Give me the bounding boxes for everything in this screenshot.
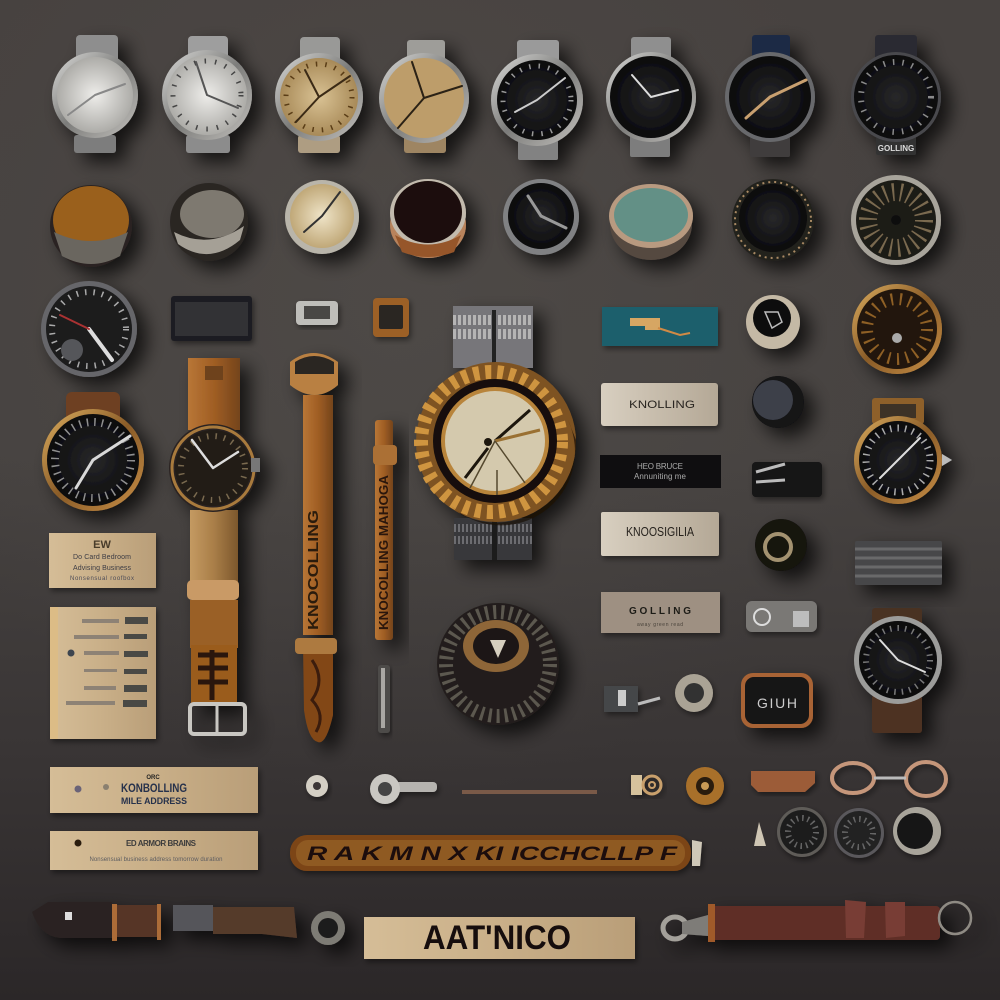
watch 8: black dial: GOLLING — [878, 144, 914, 153]
narrow strap: KNOCOLLING MAHOGA — [376, 474, 391, 630]
three mini dials — [777, 807, 941, 858]
wide label: KNOWLEDGE: MILE ADDRESS — [121, 796, 187, 806]
dial: teal face — [609, 184, 693, 260]
dial: black gold edge — [732, 179, 814, 261]
twin rings — [832, 762, 946, 796]
small dial — [746, 295, 800, 349]
watch 6: black dial — [606, 37, 696, 157]
teal label — [602, 307, 718, 346]
spec card: Nonsensual roofbox — [70, 576, 134, 582]
label: black: HEO BRUCE — [637, 462, 683, 471]
lower left strap — [32, 902, 345, 945]
tiny pendant — [754, 822, 766, 846]
label: black: Annuniting me — [634, 472, 687, 481]
spec card: Advising Business — [73, 565, 132, 572]
lower right strap with ring — [663, 900, 971, 942]
watch: left bronze — [42, 392, 144, 511]
watch 2: silver white dial — [162, 36, 252, 153]
carved leather band: R A K M N X KI ICCHCLLP F — [307, 844, 679, 865]
dial: dark gold — [852, 284, 942, 374]
label: KNOOLING beige: KNOOSIGILIA — [626, 524, 694, 539]
list card — [50, 607, 156, 739]
washer — [306, 775, 328, 797]
grey ribbed strip — [855, 541, 942, 585]
watch 4: tan dial — [379, 40, 469, 153]
copper bar — [751, 771, 815, 792]
carved leather band — [290, 835, 702, 871]
key tool — [370, 774, 437, 804]
dial: cream face — [285, 180, 359, 254]
silver plate — [746, 601, 817, 632]
watch 7: dark dial navy strap — [725, 35, 815, 157]
dial: speedometer gauge — [41, 281, 137, 377]
spec card — [49, 533, 156, 588]
thin pin — [462, 790, 597, 794]
dial: amber dome — [50, 185, 132, 267]
black clasp part — [752, 462, 822, 497]
label: KNOLLING white — [601, 383, 718, 426]
wide label: small text — [50, 831, 258, 870]
narrow strap — [373, 420, 397, 640]
dial: grey tilted case — [170, 183, 248, 261]
watch 8: black dial — [851, 35, 941, 155]
label: GOLLING: GOLLING — [629, 606, 691, 617]
watch 3: gold tan dial — [275, 37, 363, 153]
small blade pin — [378, 665, 390, 733]
dial: bronze sunburst — [851, 175, 941, 265]
watch: right lower bronze — [854, 398, 952, 504]
long strap with clasp — [290, 353, 338, 742]
gold ring — [686, 767, 724, 805]
label: black — [600, 455, 721, 488]
spec card: Do Card Bedroom — [73, 554, 131, 561]
dial: small swirl — [755, 519, 807, 571]
long strap with clasp: KNOCOLLING — [305, 510, 322, 630]
wide label: KNOWLEDGE: ORC — [146, 775, 160, 781]
watch: tall leather strap with buckle — [169, 358, 260, 734]
wide label: small text: ED ARMOR BRAINS — [126, 839, 197, 848]
label: KNOLLING white: KNOLLING — [629, 399, 695, 411]
brand label AATNICO — [364, 917, 635, 959]
copper buckle piece — [373, 298, 409, 337]
medallion — [437, 603, 559, 725]
centerpiece watch — [416, 306, 576, 560]
rounded badge — [741, 673, 813, 728]
brand label AATNICO: AAT'NICO — [423, 919, 571, 957]
label: KNOOLING beige — [601, 512, 719, 556]
dial: dark copper ring — [390, 179, 466, 258]
knob: navy dome — [752, 376, 804, 428]
rounded badge: GIUH — [757, 695, 797, 711]
spiral pieces — [631, 775, 661, 795]
wide label: small text: Nonsensual business address tomorrow duration — [90, 857, 222, 863]
metal clip — [296, 301, 338, 325]
label: GOLLING: away green read — [637, 622, 683, 628]
spec card: EW — [93, 539, 111, 551]
black fabric patch — [171, 296, 252, 341]
key clip and round dial — [604, 674, 713, 712]
label: GOLLING — [601, 592, 720, 633]
dial: dark silver — [503, 179, 579, 255]
watch 1: silver white dial — [52, 35, 138, 153]
wide label: KNOWLEDGE — [50, 767, 258, 813]
wide label: KNOWLEDGE: KONBOLLING — [121, 781, 187, 795]
watch: right lower black — [854, 608, 942, 733]
watch 5: silver black dial — [491, 40, 583, 160]
